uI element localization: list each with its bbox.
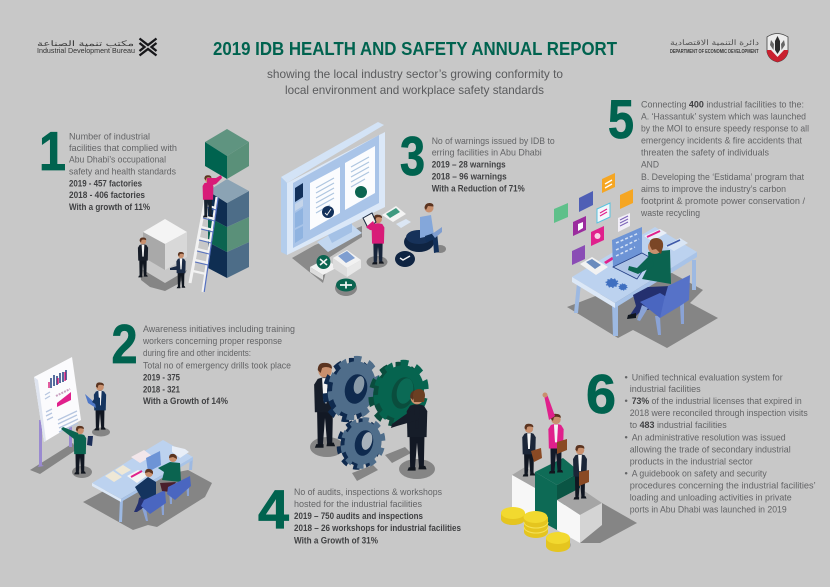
bullet list: ports in Abu Dhabi was launched in 2019 bbox=[630, 504, 787, 515]
description 5: footprint & promote power conservation / bbox=[641, 195, 805, 206]
section 3 text bbox=[400, 125, 555, 194]
bullet list: allowing the trade of secondary industrial bbox=[630, 443, 791, 454]
green top cube bbox=[205, 129, 249, 179]
papers with green badge bbox=[310, 250, 361, 280]
description 1: With a growth of 11% bbox=[69, 201, 151, 212]
desk items bbox=[580, 229, 688, 290]
seated person in green bbox=[627, 238, 671, 319]
monitor stand bbox=[317, 221, 362, 252]
standing man with laptop bbox=[85, 382, 110, 436]
description 1: Number of industrial bbox=[69, 130, 150, 141]
description 4 bbox=[294, 486, 461, 545]
logo: Industrial Development Bureau: مكتب تنمية الصناعة bbox=[37, 39, 134, 48]
description 4: 2019 – 750 audits and inspections bbox=[294, 510, 423, 521]
description 3: 2019 – 28 warnings bbox=[432, 159, 506, 170]
presentation board bbox=[34, 357, 81, 467]
podium right step bbox=[557, 488, 602, 543]
coin stacks bbox=[501, 507, 571, 552]
description 3: With a Reduction of 71% bbox=[432, 183, 525, 194]
description 1: 2018 - 406 factories bbox=[69, 189, 145, 200]
description 1: 2019 - 457 factories bbox=[69, 177, 142, 188]
bullet list: procedures concerning the industrial facilities’ bbox=[630, 480, 816, 491]
number 1: 1 bbox=[39, 120, 66, 182]
number 4: 4 bbox=[258, 478, 289, 540]
description 2: during fire and other incidents: bbox=[143, 347, 251, 358]
man pointing at board bbox=[61, 426, 93, 478]
logo: Industrial Development Bureau bbox=[37, 38, 156, 56]
ladder bbox=[190, 197, 218, 292]
number 6: 6 bbox=[586, 363, 616, 425]
description 1 bbox=[69, 130, 177, 212]
description 4: hosted for the industrial facilities bbox=[294, 498, 422, 509]
description 2: Total no of emergency drills took place bbox=[143, 359, 291, 370]
description 2: 2018 - 321 bbox=[143, 383, 180, 394]
small blue gear bbox=[334, 416, 388, 471]
section 4 text bbox=[258, 478, 461, 545]
podium centre step bbox=[535, 458, 580, 530]
logo: Department of Economic Development: DEPARTMENT OF ECONOMIC DEVELOPMENT bbox=[670, 49, 759, 55]
logo: Department of Economic Development bbox=[670, 34, 788, 62]
description 5: aims to improve the industry’s carbon bbox=[641, 183, 786, 194]
description 5: Connecting 400 industrial facilities to the: bbox=[641, 98, 804, 109]
description 3: 2018 – 96 warnings bbox=[432, 171, 507, 182]
description 5 bbox=[640, 98, 809, 218]
bullet list: 2018 were reconciled through inspection visits bbox=[630, 407, 808, 418]
illustration 2: training board and meeting table bbox=[30, 357, 212, 530]
description 4: 2018 – 26 workshops for industrial facilities bbox=[294, 522, 461, 533]
green gear bbox=[365, 358, 432, 428]
bullet list: products in the industrial sector bbox=[630, 455, 753, 466]
description 1: facilities that complied with bbox=[69, 142, 177, 153]
number 2: 2 bbox=[112, 313, 138, 375]
cube stack bbox=[208, 179, 249, 278]
description 5: waste recycling bbox=[640, 207, 700, 218]
description 3: No of warnings issued by IDB to bbox=[432, 135, 555, 146]
subtitle: local environment and workplace safety standards bbox=[285, 83, 544, 97]
illustration 6: podium with winners and coins bbox=[501, 392, 637, 552]
meeting table bbox=[83, 440, 212, 530]
description 2 bbox=[142, 323, 295, 406]
worker climbing bbox=[203, 175, 222, 217]
section 5 text bbox=[608, 88, 809, 218]
warning panel right bbox=[345, 146, 375, 210]
illustration 3: monitor with warnings bbox=[281, 122, 446, 296]
green plus button bbox=[335, 278, 357, 296]
bullet list bbox=[624, 371, 816, 515]
subtitle: showing the local industry sector’s growing conformity to bbox=[267, 67, 563, 81]
description 4: With a Growth of 31% bbox=[294, 534, 379, 545]
illustration 5: person at desk with floating app icons bbox=[554, 173, 718, 348]
bullet list: A guidebook on safety and security bbox=[632, 468, 767, 479]
podium left step bbox=[512, 467, 548, 520]
illustration 4: gears and workers bbox=[310, 354, 435, 481]
description 5: B. Developing the ‘Estidama’ program that bbox=[641, 171, 804, 182]
blue gear bbox=[319, 354, 384, 424]
description 5: by the MOI to ensure speedy response to all bbox=[641, 123, 809, 134]
worker left bbox=[138, 238, 148, 277]
seated person green bbox=[158, 454, 191, 504]
description 4: No of audits, inspections & workshops bbox=[294, 486, 442, 497]
description 1: safety and health standards bbox=[69, 166, 176, 177]
section 2 text bbox=[112, 313, 295, 406]
monitor bbox=[281, 122, 385, 255]
section 6 text bbox=[586, 363, 816, 515]
subtitle bbox=[267, 67, 563, 97]
right worker bbox=[391, 389, 427, 471]
white cube bbox=[143, 219, 187, 270]
left worker bbox=[314, 363, 336, 448]
seated person navy bbox=[134, 469, 166, 521]
description 1: Abu Dhabi’s occupational bbox=[69, 154, 166, 165]
warning panel left bbox=[310, 167, 340, 230]
description 3: erring facilities in Abu Dhabi bbox=[432, 147, 542, 158]
desk bbox=[572, 227, 697, 336]
description 5: AND bbox=[641, 159, 659, 170]
winner right bbox=[573, 445, 589, 499]
floating app icons bbox=[554, 173, 633, 265]
winner centre bbox=[542, 392, 567, 474]
bullet list: • bbox=[624, 431, 628, 442]
section 1 text bbox=[39, 120, 177, 212]
title: 2019 IDB HEALTH AND SAFETY ANNUAL REPORT bbox=[213, 38, 618, 59]
worker right bbox=[170, 252, 186, 288]
sidebar bbox=[295, 183, 303, 243]
description 2: With a Growth of 14% bbox=[143, 395, 229, 406]
description 3 bbox=[432, 135, 555, 194]
seated man with laptop bbox=[404, 203, 446, 253]
logo: Industrial Development Bureau: Industrial Development Bureau bbox=[37, 46, 135, 55]
number 5: 5 bbox=[608, 88, 634, 150]
bullet list: Unified technical evaluation system for bbox=[632, 371, 783, 382]
navy check button bbox=[395, 251, 415, 267]
bullet list: to 483 industrial facilities bbox=[630, 419, 727, 430]
illustration 1: stacked cubes, ladder and workers bbox=[138, 129, 249, 292]
description 2: workers concerning proper response bbox=[142, 335, 282, 346]
description 5: A. ‘Hassantuk’ system which was launched bbox=[641, 110, 806, 121]
bullet list: loading and unloading activities in private bbox=[630, 492, 792, 503]
bullet list: • bbox=[624, 395, 628, 406]
description 5: emergency incidents & fire accidents that bbox=[641, 135, 802, 146]
description 2: Awareness initiatives including training bbox=[143, 323, 295, 334]
desk papers bbox=[382, 206, 411, 228]
bullet list: • bbox=[624, 468, 628, 479]
winner left bbox=[522, 424, 542, 476]
bullet list: 73% of the industrial licenses that expired in bbox=[632, 395, 802, 406]
blue chair bbox=[637, 275, 690, 335]
person with tablet bbox=[363, 213, 388, 268]
number 3: 3 bbox=[400, 125, 425, 187]
bullet list: An administrative resolution was issued bbox=[632, 431, 786, 442]
description 2: 2019 - 375 bbox=[143, 371, 180, 382]
logo: Department of Economic Development: دائرة التنمية الاقتصادية bbox=[670, 38, 760, 47]
bullet list: • bbox=[624, 371, 628, 382]
laptop bbox=[612, 227, 651, 279]
description 5: threaten the safety of individuals bbox=[641, 147, 769, 158]
bullet list: industrial facilities bbox=[630, 383, 701, 394]
